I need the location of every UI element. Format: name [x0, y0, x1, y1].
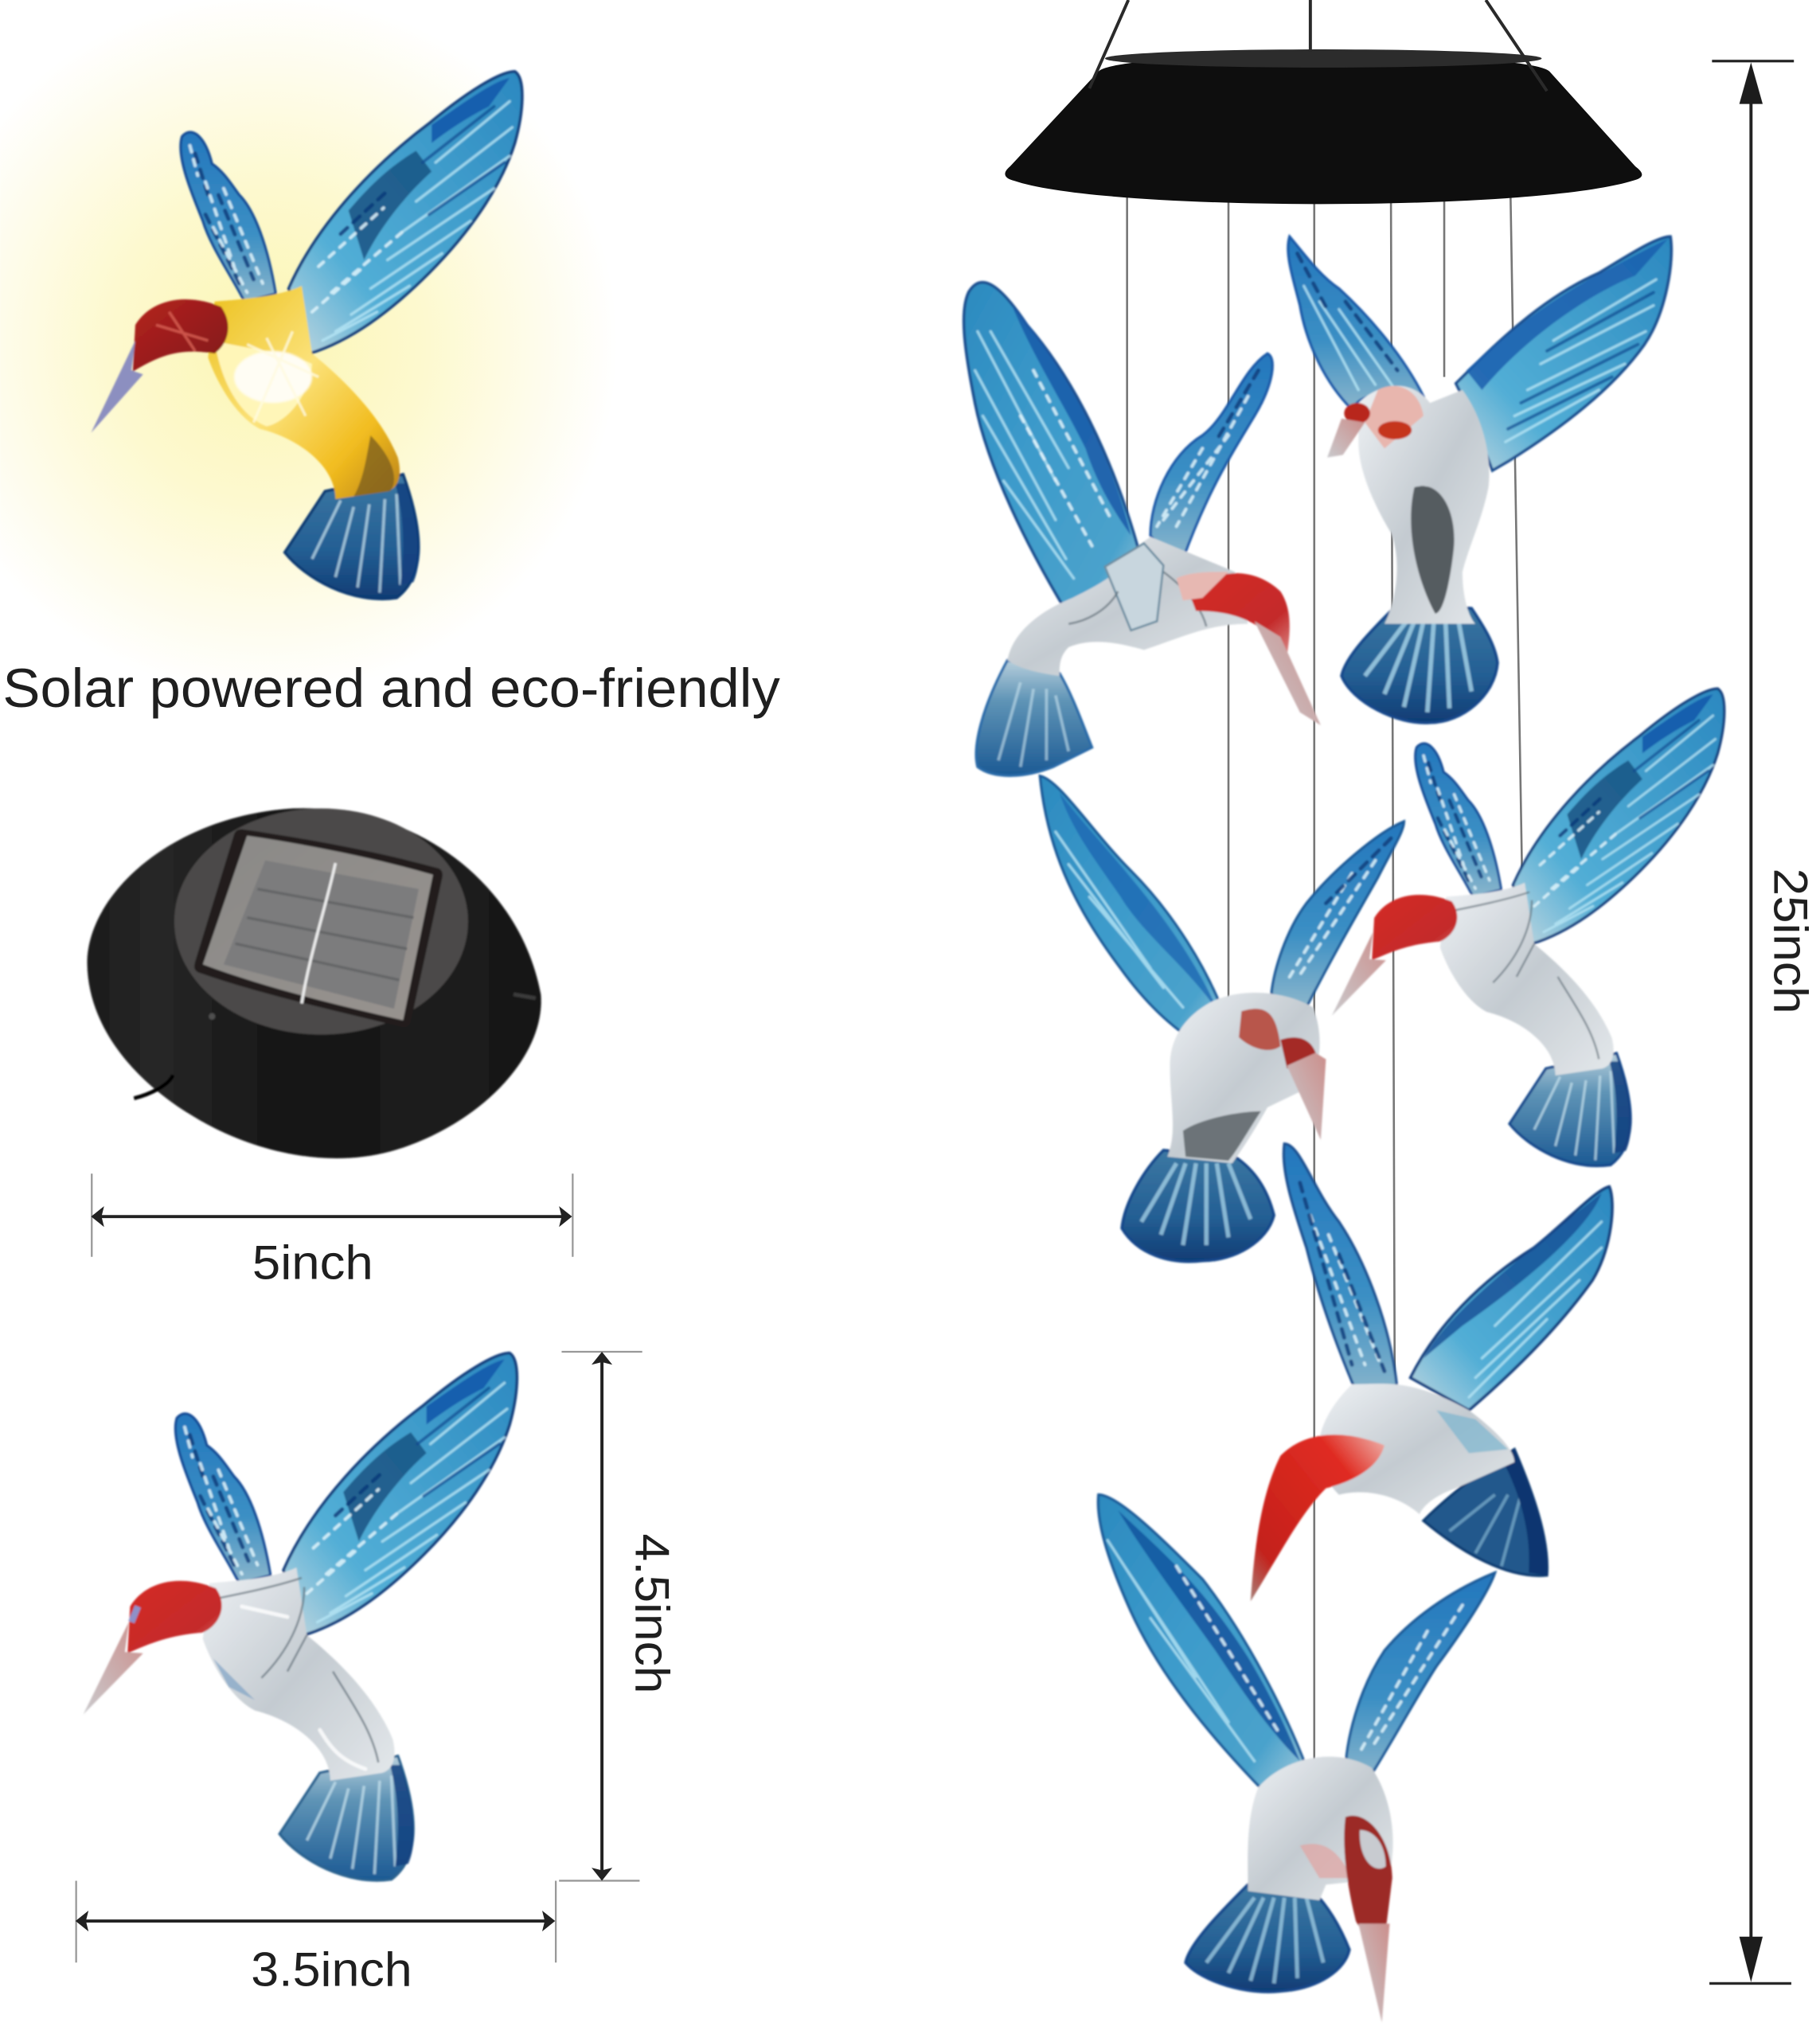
- bird 3: middle left, front view: [1040, 776, 1404, 1262]
- dimension: 25 inch total height: [1709, 61, 1818, 1983]
- icon: hummingbird side view: [84, 1353, 517, 1880]
- solar canopy: [1005, 0, 1642, 204]
- panel: single hummingbird with dimensions: [76, 1352, 680, 1997]
- bird 2: upper right, front view: [1288, 236, 1671, 723]
- bird 4: middle right, side view: [1332, 689, 1724, 1165]
- dimension: 5 inch: 5inch: [252, 1236, 373, 1290]
- panel: solar powered glowing hummingbird: [0, 0, 780, 719]
- icon: solar lid: [88, 808, 541, 1158]
- panel: wind chime assembly: [964, 0, 1818, 2022]
- icon: lit hummingbird: [91, 72, 522, 599]
- bird 1: upper left, facing right: [964, 283, 1321, 775]
- heading: solar powered and eco-friendly: Solar powered and eco-friendly: [2, 658, 780, 719]
- bird 5: lower right, side view: [1251, 1144, 1612, 1601]
- panel: solar lid with 5 inch dimension: [88, 808, 572, 1290]
- dimension: 4.5 inch height: [559, 1352, 680, 1880]
- hanging strings: [1127, 195, 1522, 1767]
- dimension: 5 inch: [91, 1173, 572, 1290]
- dimension: 3.5 inch width: [76, 1880, 556, 1997]
- dimension: 25 inch total height: 25inch: [1764, 869, 1818, 1013]
- bird 6: bottom, front view: [1098, 1495, 1495, 2022]
- dimension: 3.5 inch width: 3.5inch: [251, 1942, 412, 1997]
- dimension: 4.5 inch height: 4.5inch: [626, 1534, 680, 1693]
- yellow light glow: [0, 0, 643, 689]
